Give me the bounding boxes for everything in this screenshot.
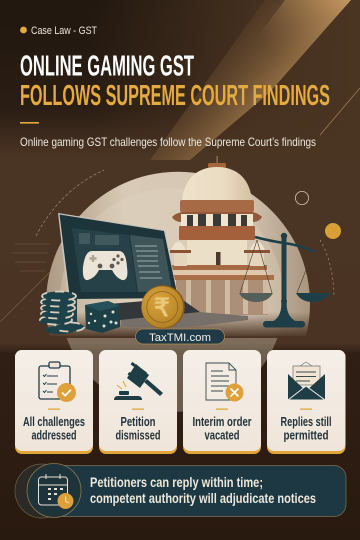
callout banner	[15, 464, 346, 518]
title rule	[20, 122, 39, 124]
decorative gold dot	[325, 223, 341, 239]
decorative ring	[295, 191, 309, 205]
label: permitted	[284, 428, 328, 442]
callout text: Petitioners can reply within time;	[90, 474, 263, 490]
title: ONLINE GAMING GST	[20, 50, 194, 82]
brand pill: TaxTMI.com	[149, 332, 211, 344]
accent	[132, 408, 144, 410]
inner disc tone	[60, 188, 284, 412]
icon: clipboard with check	[39, 362, 76, 402]
accent	[216, 408, 228, 410]
label: Interim order	[192, 415, 252, 429]
category tag: Case Law - GST	[31, 25, 97, 37]
brand pill	[136, 329, 224, 344]
ground fade	[40, 312, 320, 338]
label: dismissed	[116, 428, 160, 442]
title	[20, 50, 330, 112]
label: Petition	[120, 415, 156, 429]
laptop	[58, 213, 248, 327]
rupee coin: ₹	[154, 294, 170, 322]
label	[23, 415, 85, 442]
poker chips	[40, 292, 84, 334]
accent	[300, 408, 312, 410]
top-right gold diagonal band	[150, 0, 351, 160]
background wash at top right	[0, 0, 360, 160]
card: petition dismissed	[99, 350, 177, 454]
label	[280, 415, 332, 442]
accent	[48, 408, 60, 410]
label: vacated	[204, 428, 240, 442]
faint left decoration	[0, 244, 52, 322]
rupee coin	[141, 285, 185, 329]
thin gold diagonal line	[320, 88, 360, 135]
dice	[85, 301, 120, 333]
supreme court building	[170, 156, 274, 315]
backdrop disc	[46, 172, 310, 336]
card: replies still permitted	[267, 350, 346, 454]
icon: open envelope	[288, 362, 325, 400]
icon: calendar with clock	[15, 464, 81, 518]
decorative dashed arc	[36, 170, 104, 236]
label: addressed	[32, 428, 76, 442]
game controller	[83, 251, 127, 280]
label	[116, 415, 160, 442]
label: All challenges	[23, 415, 85, 429]
decorative dotted arc	[320, 240, 334, 295]
label	[192, 415, 252, 442]
callout text	[90, 474, 316, 506]
scales of justice	[239, 233, 330, 328]
icon: document with cross	[206, 363, 244, 402]
card: all challenges addressed	[15, 350, 93, 454]
illustration: court, laptop, scales	[0, 156, 341, 412]
label: Replies still	[280, 415, 332, 429]
card: interim order vacated	[183, 350, 261, 454]
icon: gavel	[114, 362, 163, 400]
